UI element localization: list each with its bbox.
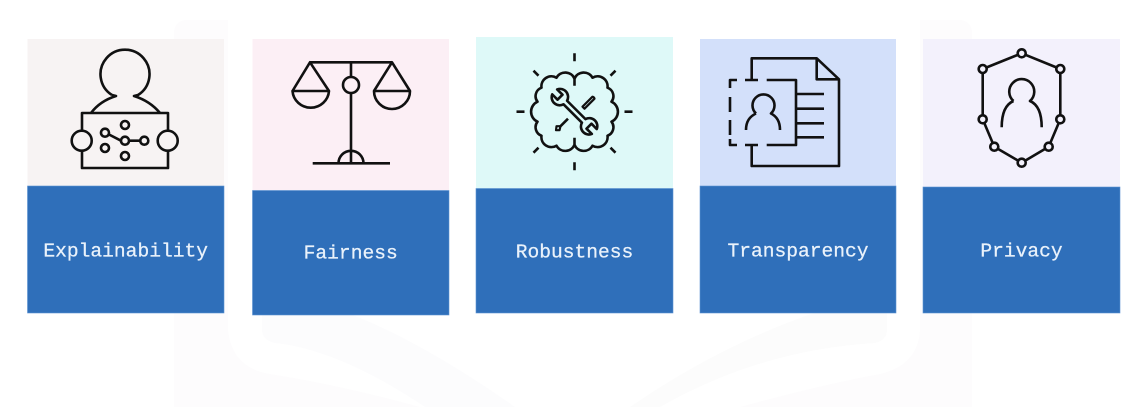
card: Explainability bbox=[28, 39, 224, 313]
icon panel: Robustness bbox=[476, 37, 673, 188]
label: Explainability: Explainability bbox=[43, 240, 208, 262]
label: Fairness: Fairness bbox=[304, 243, 398, 265]
icon: document with person profile bbox=[730, 58, 839, 166]
icon panel: Privacy bbox=[923, 39, 1120, 187]
card: Transparency bbox=[700, 39, 896, 313]
card: Fairness bbox=[252, 39, 449, 315]
label panel: Robustness bbox=[476, 188, 673, 313]
icon panel: Explainability bbox=[28, 39, 224, 186]
label panel: Explainability bbox=[28, 186, 224, 313]
icon panel: Transparency bbox=[700, 39, 896, 186]
icon: person holding network diagram bbox=[72, 50, 178, 168]
label panel: Fairness bbox=[252, 190, 449, 315]
icon: balance scale bbox=[292, 62, 410, 163]
icon: shield with person bbox=[979, 49, 1064, 167]
label: Privacy: Privacy bbox=[980, 240, 1063, 262]
label panel: Transparency bbox=[700, 186, 896, 313]
label: Robustness: Robustness bbox=[516, 241, 633, 263]
card: Privacy bbox=[923, 39, 1120, 313]
icon panel: Fairness bbox=[252, 39, 449, 190]
card: Robustness bbox=[476, 37, 673, 313]
label: Transparency: Transparency bbox=[727, 240, 869, 262]
label panel: Privacy bbox=[923, 187, 1120, 313]
background watermark bbox=[174, 0, 972, 407]
icon: brain with tools bbox=[516, 53, 632, 170]
